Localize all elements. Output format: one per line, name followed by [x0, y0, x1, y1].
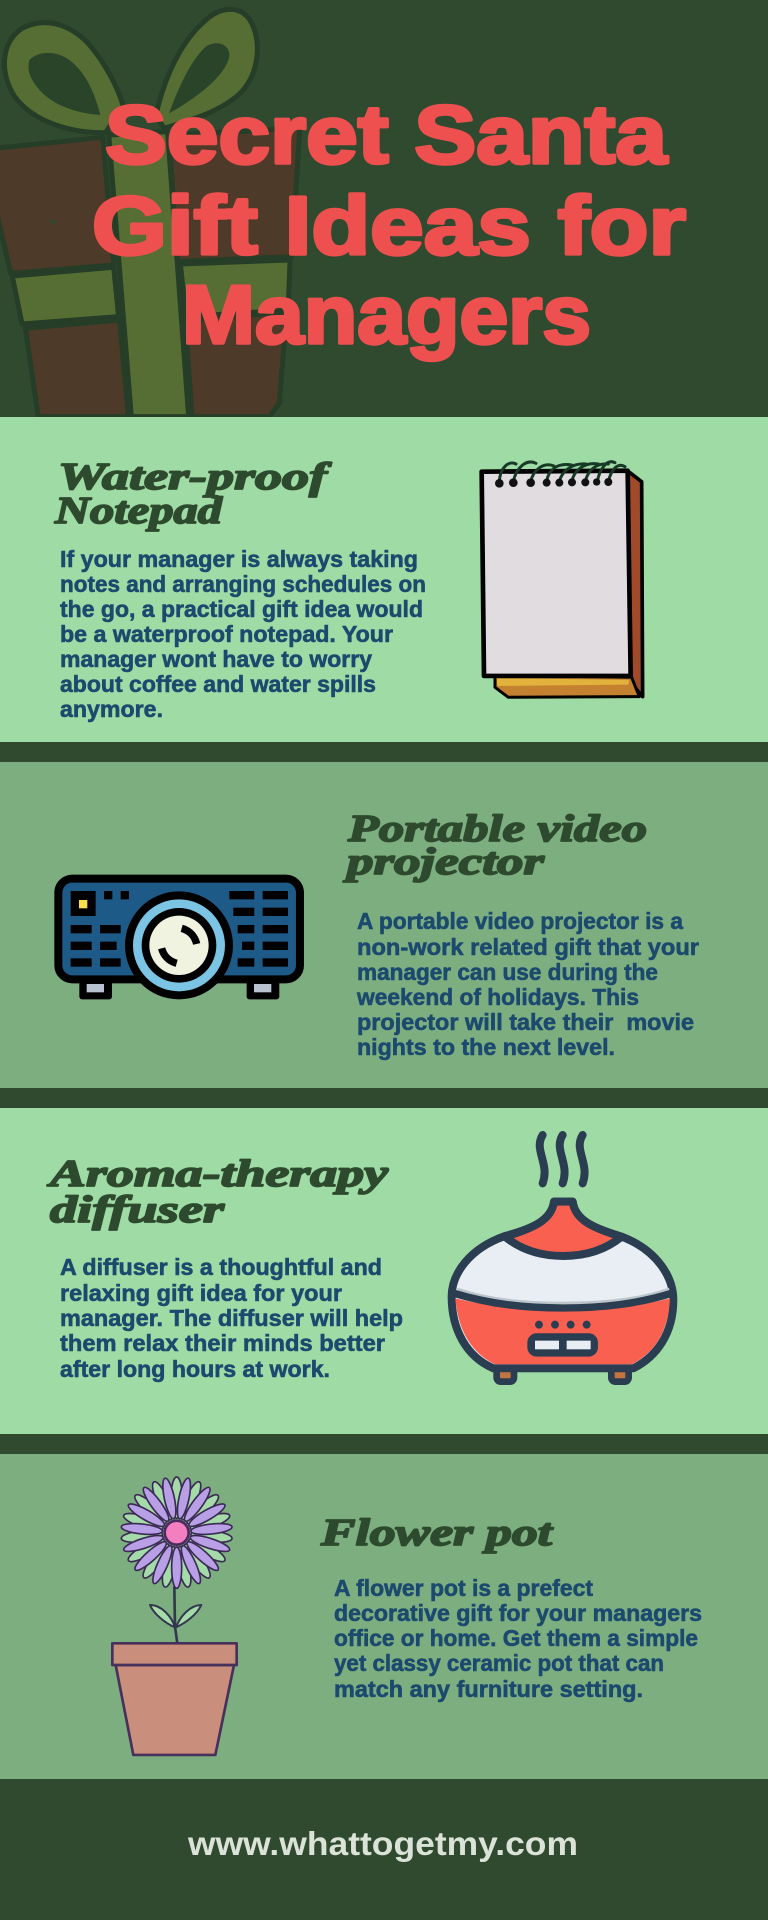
divider band 2 [0, 1088, 768, 1108]
heading: water-proof notepad: Notepad [54, 490, 223, 532]
text: flower pot description [334, 1575, 702, 1702]
text: projector description: non-work related gift that your [357, 934, 699, 960]
heading: flower pot: Flower pot [320, 1512, 554, 1554]
panel: portable video projector [0, 762, 768, 1088]
title: Managers [182, 268, 591, 361]
text: flower pot description: A flower pot is a prefect [334, 1575, 593, 1601]
divider band 3 [0, 1434, 768, 1454]
title [92, 88, 686, 361]
text: flower pot description: yet classy ceramic pot that can [334, 1650, 664, 1676]
text: diffuser description: A diffuser is a thoughtful and [60, 1254, 382, 1280]
title: Gift Ideas for [92, 179, 686, 272]
text: flower pot description: office or home. Get them a simple [334, 1625, 698, 1651]
text: notepad description: notes and arranging schedules on [60, 571, 426, 597]
text: notepad description: about coffee and water spills [60, 671, 376, 697]
text: diffuser description: relaxing gift idea for your [60, 1280, 342, 1306]
text: notepad description: manager wont have to worry [60, 646, 372, 672]
icon: video projector [58, 879, 300, 999]
panel: aroma-therapy diffuser [0, 1108, 768, 1434]
footer url: www.whattogetmy.com [187, 1825, 578, 1862]
panel: water-proof notepad [0, 417, 768, 742]
panel: footer [0, 1779, 768, 1920]
text: projector description [356, 908, 699, 1060]
divider band 1 [0, 742, 768, 762]
heading: aroma-therapy diffuser: diffuser [50, 1189, 226, 1231]
text: flower pot description: match any furniture setting. [334, 1676, 643, 1702]
title: Secret Santa [105, 88, 668, 181]
text: notepad description: be a waterproof notepad. Your [60, 621, 393, 647]
heading: water-proof notepad: Water-proof [58, 456, 332, 498]
icon: aroma diffuser [452, 1135, 673, 1382]
heading: portable video projector [343, 808, 647, 883]
icon: notepad [482, 462, 643, 697]
text: projector description: projector will take their movie [357, 1009, 694, 1035]
text: diffuser description: manager. The diffuser will help [60, 1305, 403, 1331]
text: notepad description [60, 546, 426, 722]
heading: portable video projector: projector [343, 841, 546, 883]
icon: gift box [0, 9, 300, 417]
text: diffuser description [60, 1254, 403, 1382]
panel: header [0, 0, 768, 417]
text: notepad description: the go, a practical gift idea would [60, 596, 423, 622]
panel: flower pot [0, 1454, 768, 1779]
text: projector description: nights to the next level. [357, 1034, 615, 1060]
heading: aroma-therapy diffuser [47, 1153, 388, 1231]
text: notepad description: anymore. [60, 696, 163, 722]
heading: portable video projector: Portable video [347, 808, 647, 850]
text: projector description: A portable video projector is a [357, 908, 683, 934]
text: diffuser description: them relax their minds better [60, 1330, 385, 1356]
icon: potted flower [112, 1477, 237, 1755]
text: diffuser description: after long hours at work. [60, 1356, 330, 1382]
text: projector description: manager can use during the [357, 959, 658, 985]
heading: aroma-therapy diffuser: Aroma-therapy [47, 1153, 388, 1195]
heading: water-proof notepad [54, 456, 332, 532]
text: notepad description: If your manager is always taking [60, 546, 418, 572]
text: flower pot description: decorative gift for your managers [334, 1600, 702, 1626]
text: projector description: weekend of holidays. This [356, 984, 639, 1010]
